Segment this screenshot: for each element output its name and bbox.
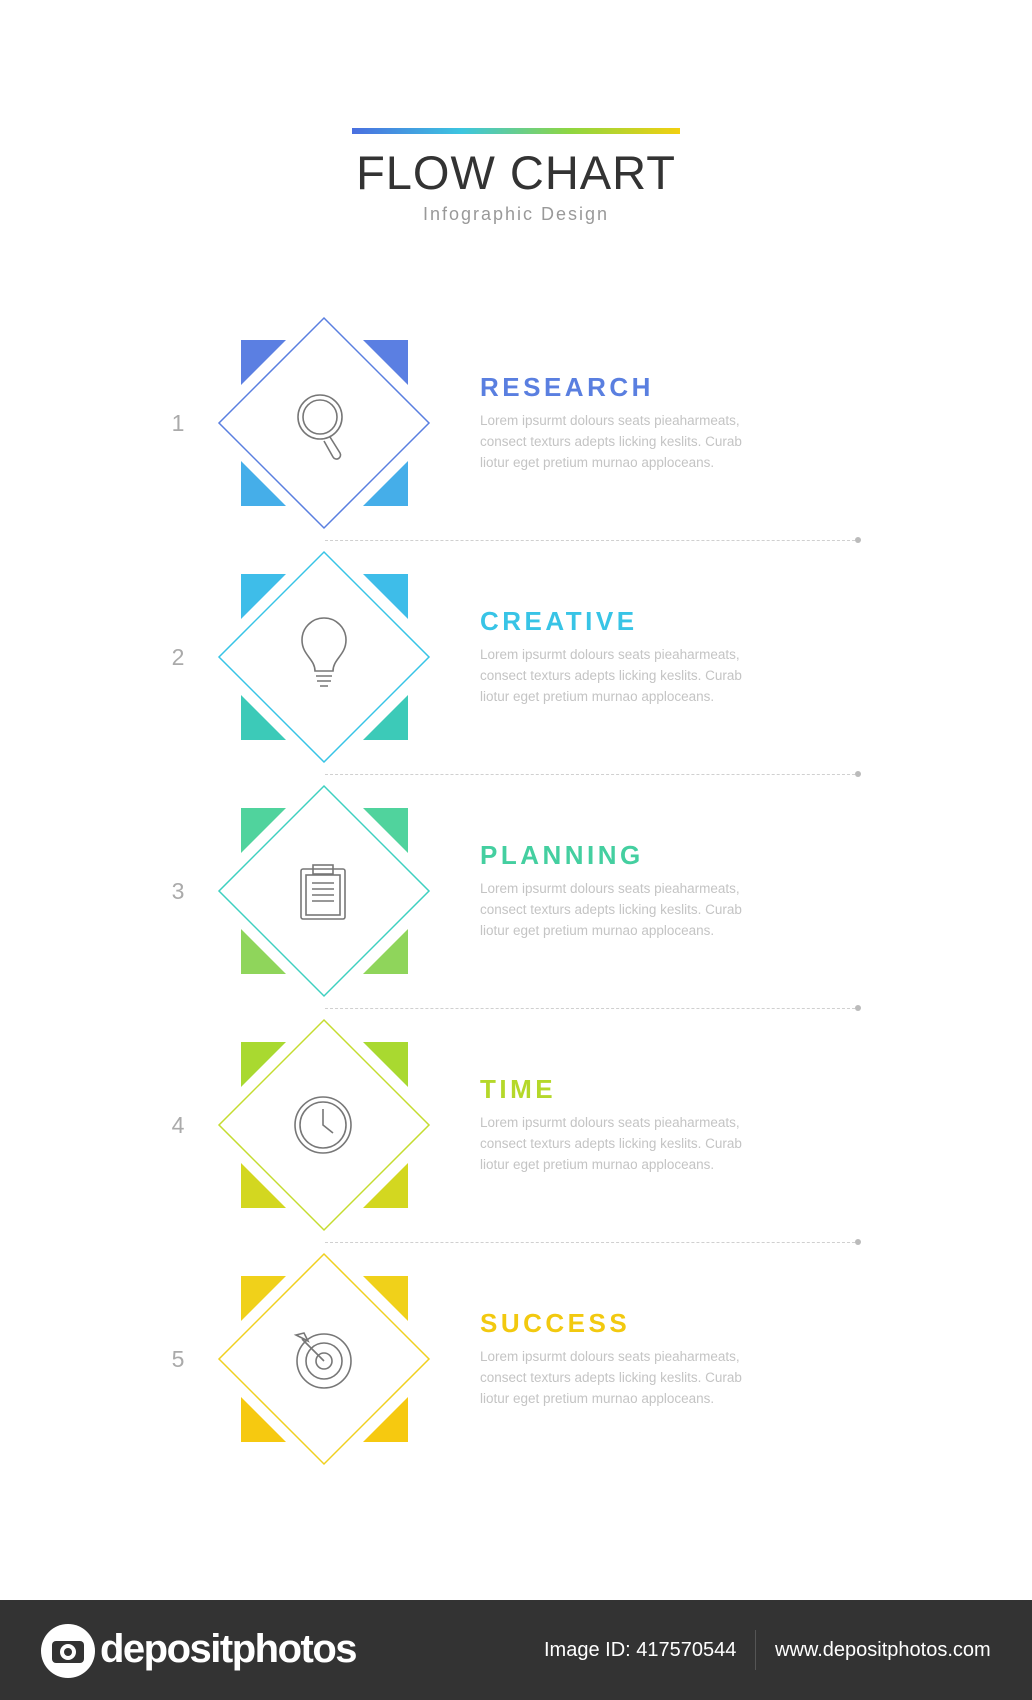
number 2: 2: [172, 644, 184, 670]
text: Lorem ipsurmt dolours seats pieaharmeats, consect texturs adepts licking keslits. Curab liotur eget pretium murnao apploceans.: [480, 1115, 742, 1172]
footer image id: Image ID: 417570544: [544, 1639, 736, 1661]
heading: TIME: [480, 1074, 556, 1104]
heading: SUCCESS: [480, 1308, 630, 1338]
text: Lorem ipsurmt dolours seats pieaharmeats, consect texturs adepts licking keslits. Curab liotur eget pretium murnao apploceans.: [480, 1349, 742, 1406]
number 3: 3: [172, 878, 184, 904]
footer bar: [0, 1600, 1032, 1700]
number 1: 1: [172, 410, 184, 436]
heading: RESEARCH: [480, 372, 654, 402]
text: Lorem ipsurmt dolours seats pieaharmeats, consect texturs adepts licking keslits. Curab liotur eget pretium murnao apploceans.: [480, 413, 742, 470]
text: Lorem ipsurmt dolours seats pieaharmeats, consect texturs adepts licking keslits. Curab liotur eget pretium murnao apploceans.: [480, 881, 742, 938]
number 4: 4: [172, 1112, 184, 1138]
text: Lorem ipsurmt dolours seats pieaharmeats, consect texturs adepts licking keslits. Curab liotur eget pretium murnao apploceans.: [480, 647, 742, 704]
step 4: time: [172, 1019, 742, 1231]
footer url: www.depositphotos.com: [775, 1639, 991, 1661]
title gradient bar: [352, 128, 680, 134]
title: FLOW CHART: [356, 146, 676, 199]
step 5: success: [172, 1253, 742, 1465]
diamond icon 4: [218, 1019, 430, 1231]
subtitle: Infographic Design: [423, 204, 609, 224]
step 2: creative: [172, 551, 742, 763]
diamond icon 1: [218, 317, 430, 529]
diamond icon 3: [218, 785, 430, 997]
diamond icon 5: [218, 1253, 430, 1465]
step 3: planning: [172, 785, 742, 997]
footer logo: [41, 1624, 356, 1678]
heading: PLANNING: [480, 840, 644, 870]
diamond icon 2: [218, 551, 430, 763]
footer logo: depositphotos: [100, 1627, 356, 1671]
heading: CREATIVE: [480, 606, 638, 636]
number 5: 5: [172, 1346, 184, 1372]
step 1: research: [172, 317, 742, 529]
